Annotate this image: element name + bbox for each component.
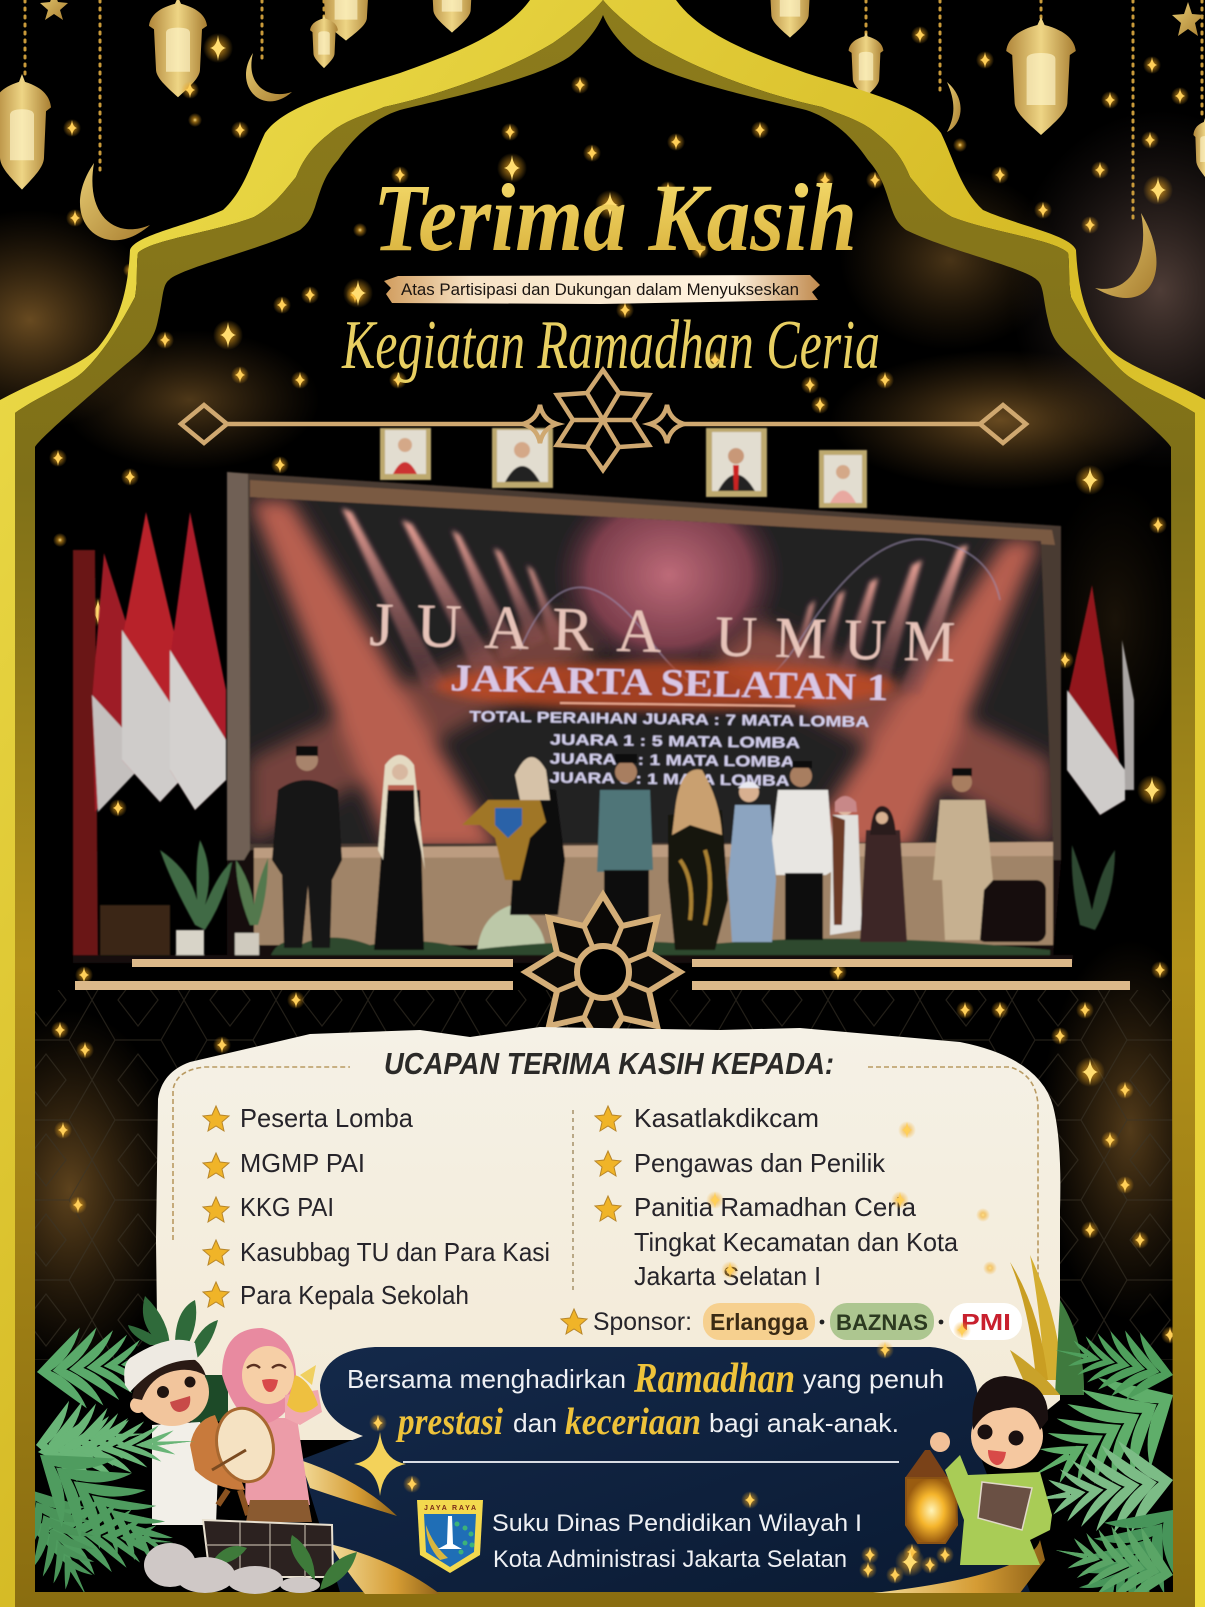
crescents and corner stars [40, 0, 1204, 298]
hanging strings [25, 0, 1202, 220]
person 3 [510, 757, 565, 915]
list: right column: Tingkat Kecamatan dan Kota [634, 1227, 959, 1257]
list: left column: MGMP PAI [240, 1148, 365, 1178]
rule [403, 1461, 899, 1463]
gold star [354, 1432, 406, 1496]
list: right column: Panitia Ramadhan Ceria [634, 1192, 917, 1222]
title: Terima Kasih: Terima Kasih [373, 164, 857, 271]
white flowers [144, 1543, 320, 1594]
speaker box [976, 880, 1046, 942]
sponsors: Erlangga [710, 1309, 808, 1335]
sponsors: PMI [961, 1309, 1011, 1335]
raised hand [930, 1432, 950, 1452]
head [971, 1376, 1048, 1469]
dashed border [173, 1067, 1038, 1290]
people on stage [272, 746, 993, 950]
small sparkles [369, 1341, 894, 1579]
sponsors: BAZNAS [836, 1310, 928, 1335]
title: Kegiatan Ramadhan Ceria: Kegiatan Ramadhan Ceria [341, 307, 880, 384]
logo: Jakarta shield: JAYA RAYA [424, 1505, 476, 1512]
palm fronds right [1038, 1330, 1173, 1592]
LED screen: JUARA 3 : 1 MATA LOMBA [549, 769, 790, 790]
person 6 [728, 782, 776, 942]
person 4 [597, 754, 653, 940]
panel sparkles [706, 1121, 997, 1339]
person 5 [668, 770, 728, 950]
LED screen [240, 475, 1060, 850]
person 2 [374, 755, 425, 950]
flower [526, 895, 680, 1049]
message line 1 [347, 1356, 944, 1402]
lectern [462, 800, 546, 880]
column divider [572, 1110, 574, 1293]
green leaves near box [210, 1535, 357, 1590]
sparkle cluster [861, 1543, 954, 1584]
message line 2: prestasi [395, 1401, 503, 1443]
floor strip [73, 955, 1073, 963]
message line 1: Bersama menghadirkan [347, 1364, 626, 1394]
person 8 [830, 796, 862, 935]
sponsors: Sponsor: [593, 1308, 692, 1336]
LED screen: UMUM [715, 603, 956, 674]
message line 2: bagi anak-anak. [709, 1408, 899, 1438]
message line 2: dan [513, 1408, 557, 1438]
message line 2 [395, 1401, 899, 1443]
flower ornament divider [75, 895, 1130, 1049]
message line 2: keceriaan [565, 1401, 701, 1443]
LED screen: JAKARTA SELATAN 1 [450, 657, 889, 709]
stage base wall [254, 842, 1053, 945]
list: left column: Para Kepala Sekolah [240, 1280, 469, 1310]
LED screen: JUARA [369, 591, 662, 666]
hanging lanterns [0, 0, 1205, 190]
characters: boy and girl with drum [124, 1296, 357, 1590]
logo: Jakarta shield [417, 1500, 483, 1573]
palm fronds behind characters [35, 1328, 173, 1592]
boy [124, 1340, 218, 1525]
palm top leaves right [1010, 1255, 1084, 1395]
dark gift box [203, 1520, 333, 1577]
message line 1: Ramadhan [633, 1356, 795, 1402]
list: left column [240, 1103, 550, 1310]
girl [222, 1328, 322, 1505]
character: boy with lantern and book [861, 1376, 1052, 1584]
list: right column [634, 1103, 959, 1291]
person 9 [860, 806, 907, 942]
sparkles [49, 26, 1189, 1344]
LED screen: TOTAL PERAIHAN JUARA : 7 MATA LOMBA [469, 708, 870, 731]
list: left column: Peserta Lomba [240, 1103, 414, 1133]
LED screen: JUARA 1 : 5 MATA LOMBA [550, 731, 800, 752]
subtitle ribbon: Atas Partisipasi dan Dukungan dalam Menyukseskan [401, 281, 799, 299]
brown basket [246, 1500, 312, 1522]
flags [73, 512, 1134, 960]
message line 1: yang penuh [803, 1364, 944, 1394]
paper background [156, 1027, 1060, 1440]
body [945, 1455, 1052, 1565]
ornament divider [181, 370, 1026, 470]
photo: award stage [73, 428, 1134, 963]
LED screen: JUARA 2 : 1 MATA LOMBA [550, 750, 795, 771]
list: right column: Jakarta Selatan I [634, 1261, 821, 1291]
gold ribbons [300, 1460, 1045, 1594]
plants and pots [100, 840, 1115, 960]
footer text: Suku Dinas Pendidikan Wilayah I [492, 1510, 862, 1537]
portraits [380, 428, 867, 508]
list: right column: Pengawas dan Penilik [634, 1148, 886, 1178]
person 1 [272, 746, 342, 948]
leaves behind heads [128, 1296, 228, 1425]
palm fronds over characters [38, 1416, 194, 1560]
drum [190, 1403, 280, 1515]
list: left column: Kasubbag TU dan Para Kasi [240, 1237, 550, 1267]
wall behind stage [227, 472, 1061, 957]
list: right column: Kasatlakdikcam [634, 1103, 819, 1133]
list: left column: KKG PAI [240, 1192, 334, 1222]
gold bars [75, 959, 1130, 990]
heading: UCAPAN TERIMA KASIH KEPADA: [384, 1046, 834, 1081]
footer text: Kota Administrasi Jakarta Selatan [493, 1546, 847, 1573]
person 10 [933, 768, 993, 940]
person 7 [772, 761, 834, 940]
panel: thank-you list [156, 1027, 1060, 1440]
lantern [905, 1450, 957, 1543]
book [978, 1482, 1032, 1530]
sponsors [593, 1303, 1022, 1340]
banner: navy message [300, 1341, 1045, 1594]
footer text [492, 1510, 862, 1573]
list stars [203, 1106, 621, 1334]
subtitle ribbon [384, 275, 820, 304]
stage frame [227, 472, 1061, 860]
